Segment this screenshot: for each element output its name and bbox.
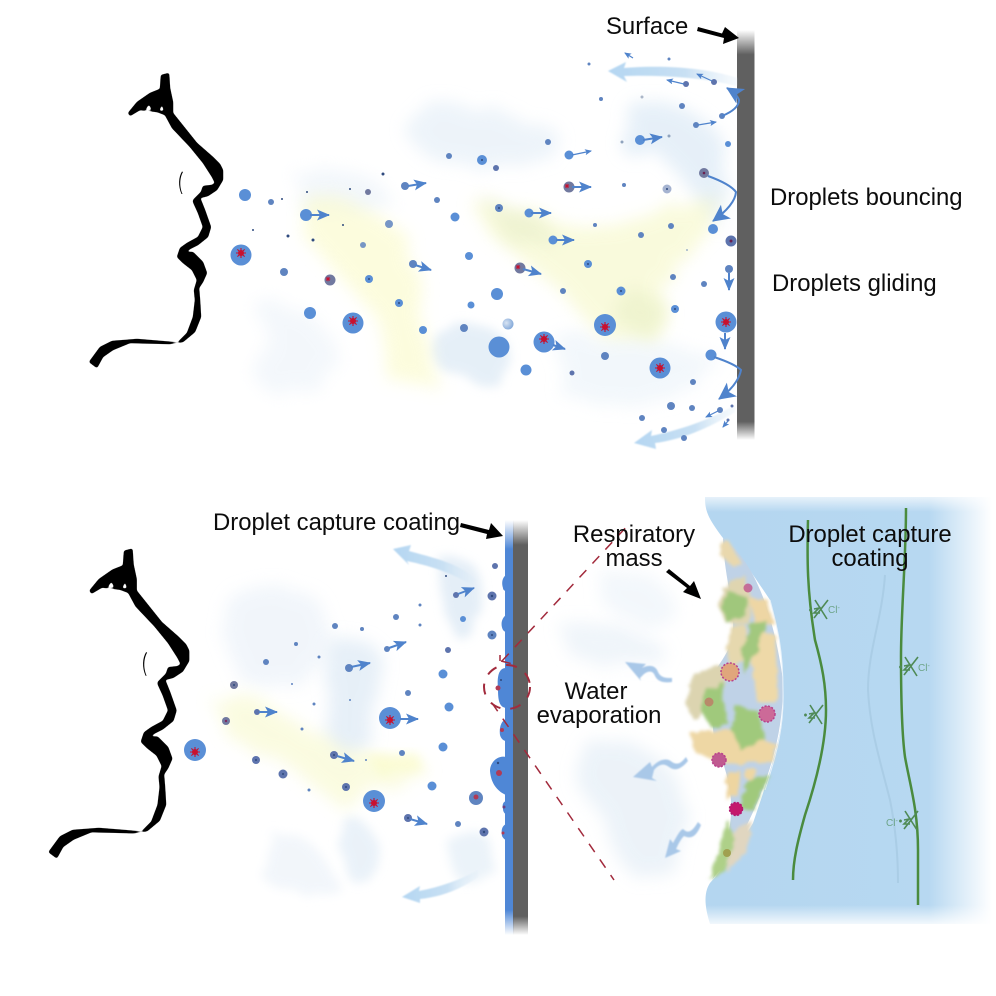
respiratory mass xyxy=(684,538,783,880)
polymer strand right xyxy=(901,508,918,905)
ion receptor with Cl label 4: Cl xyxy=(886,818,895,829)
droplets top xyxy=(239,58,736,441)
panel: droplet capture coating scenario xyxy=(48,492,996,935)
ion receptor with Cl label 3: - xyxy=(927,663,930,670)
ion receptor with Cl label 1 xyxy=(809,600,840,619)
label: Droplets bouncing: Droplets bouncing xyxy=(770,184,963,211)
top aerosol clouds xyxy=(262,106,728,406)
label: Droplet capture coating: Droplet capture coating xyxy=(213,509,460,536)
label: Respiratory mass: mass xyxy=(605,545,663,572)
coating layer with captured droplets xyxy=(490,520,514,935)
ion receptor with Cl label 3: Cl xyxy=(918,663,927,674)
ion receptor with Cl label 4: - xyxy=(895,818,898,825)
label: Water evaporation: evaporation xyxy=(537,702,661,729)
arrow: coating pointer xyxy=(460,523,503,539)
face profile bottom xyxy=(48,549,189,858)
right detail fluid panel xyxy=(700,492,996,927)
panel: plain surface scenario xyxy=(89,13,963,449)
label: Droplet capture coating detail: coating xyxy=(831,545,909,572)
water evaporation arrow 3 xyxy=(665,822,701,858)
faint background strand xyxy=(868,575,898,883)
ion receptor 2 xyxy=(804,705,823,724)
surface wall xyxy=(737,30,754,440)
water evaporation arrow 2 xyxy=(633,757,688,781)
virus droplets bottom xyxy=(184,707,483,812)
label: Droplets gliding: Droplets gliding xyxy=(772,270,937,297)
virus droplets top xyxy=(230,182,736,378)
large rebound arrow lower xyxy=(634,405,735,449)
motion arrows top xyxy=(310,53,729,427)
label: Respiratory mass: Respiratory xyxy=(573,521,695,548)
large rebound arrow upper xyxy=(608,62,737,86)
arrow: surface pointer xyxy=(697,27,739,44)
ion receptor with Cl label 3 xyxy=(899,657,930,676)
zoom indicator dashed lines xyxy=(484,523,630,880)
motion arrows bottom xyxy=(259,588,474,824)
water evaporation arrow 1 xyxy=(625,662,672,682)
bouncing droplet trajectories xyxy=(708,88,741,399)
capture wall xyxy=(513,520,528,935)
label: Droplet capture coating detail: Droplet capture xyxy=(788,521,952,548)
ion receptor with Cl label 1: Cl xyxy=(828,605,837,616)
ion receptor with Cl label 4 xyxy=(886,811,918,830)
ion receptor with Cl label 1: - xyxy=(837,605,840,612)
label: Water evaporation: Water xyxy=(565,678,627,705)
face profile top xyxy=(89,73,223,368)
label: Surface: Surface xyxy=(606,13,688,40)
polymer strand left xyxy=(793,520,826,880)
arrow: mass pointer xyxy=(666,569,701,599)
large rebound arrow upper xyxy=(393,545,476,585)
bottom aerosol clouds xyxy=(210,558,684,895)
large rebound arrow lower xyxy=(402,870,478,903)
droplets bottom xyxy=(222,563,498,836)
